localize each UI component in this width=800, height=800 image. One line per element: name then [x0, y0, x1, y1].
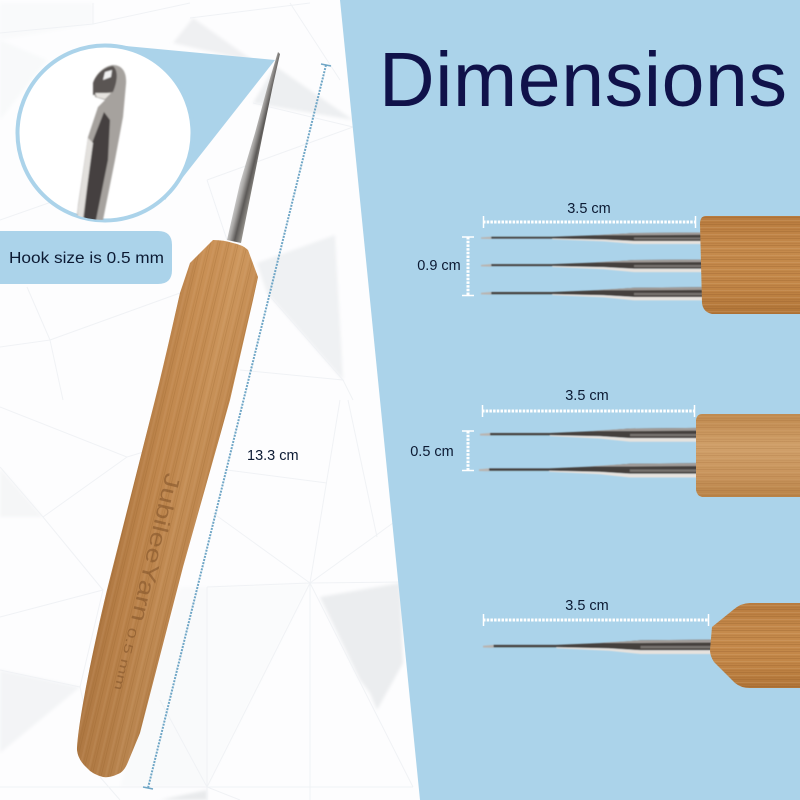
bamboo block	[710, 603, 800, 688]
engraved brand text: JubileeYarn	[126, 471, 185, 625]
blue panel	[340, 0, 800, 800]
engraved brand text	[111, 471, 185, 692]
dimension: hook length 13.3 cm	[143, 64, 331, 789]
engraved brand text: 0.5 mm	[111, 626, 140, 692]
three-needle tool	[417, 201, 800, 314]
title: Dimensions	[379, 37, 787, 123]
bamboo block	[700, 216, 800, 314]
dimension: 0.5 cm: 0.5 cm	[410, 444, 454, 460]
callout label: hook size: Hook size is 0.5 mm	[9, 250, 164, 267]
dimension: 0.9 cm	[417, 237, 474, 296]
dimension: 3.5 cm: 3.5 cm	[565, 598, 609, 614]
dimension: hook length 13.3 cm: 13.3 cm	[247, 448, 299, 464]
crochet hook: full tool	[77, 52, 280, 777]
single-needle tool	[483, 598, 800, 688]
bamboo block	[696, 414, 800, 497]
two-needle tool	[410, 388, 800, 497]
callout label: hook size	[0, 231, 172, 284]
hook needle	[227, 52, 280, 243]
needle	[483, 640, 712, 654]
dimension: 0.5 cm	[410, 431, 474, 470]
dimension: 0.9 cm: 0.9 cm	[417, 258, 461, 274]
needles	[479, 428, 698, 478]
bamboo handle	[77, 240, 258, 777]
dimension: 3.5 cm: 3.5 cm	[565, 388, 609, 404]
icon: enlarged hook tip	[76, 65, 126, 225]
needles	[481, 232, 703, 300]
callout: hook zoom	[18, 44, 275, 225]
dimension: 3.5 cm: 3.5 cm	[567, 201, 611, 217]
